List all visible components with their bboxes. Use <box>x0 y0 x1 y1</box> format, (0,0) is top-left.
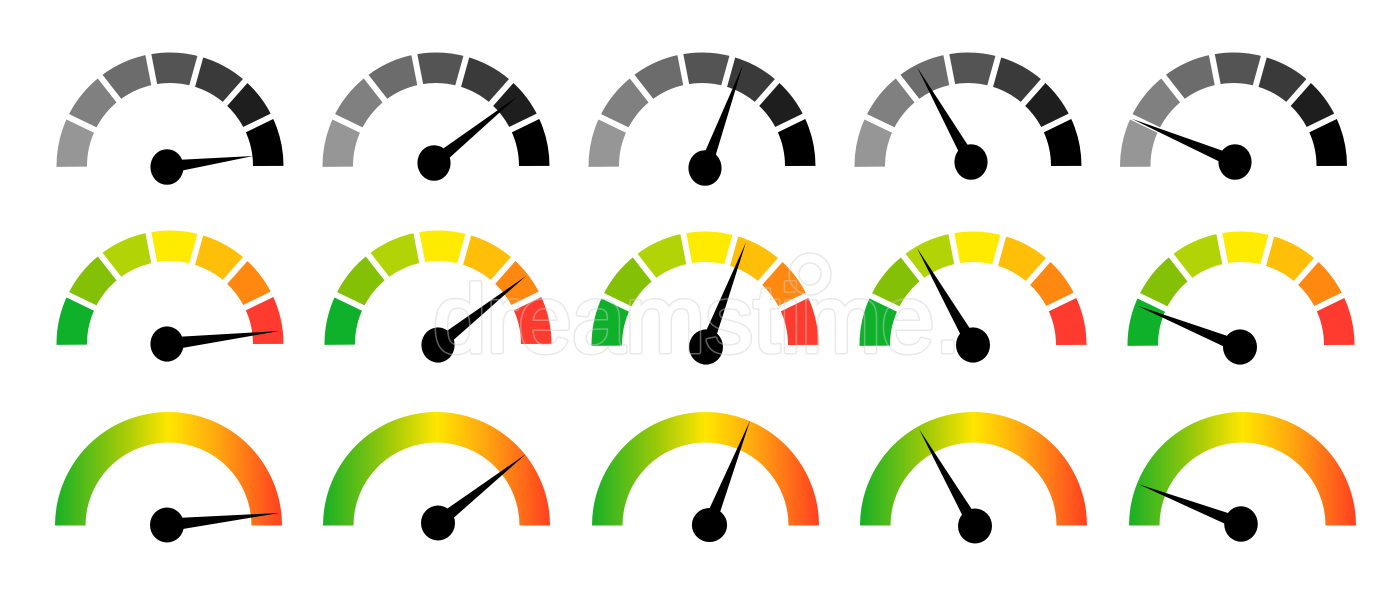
gauge: colour needle far right <box>31 205 309 483</box>
hub <box>956 327 990 363</box>
gauge: gradient needle near top right <box>592 412 819 542</box>
dial <box>1129 412 1356 526</box>
hub <box>954 144 988 180</box>
hub <box>417 145 451 181</box>
hub <box>150 326 184 362</box>
row: grey segmented gauges <box>31 27 1372 305</box>
hub <box>150 149 184 185</box>
hub <box>958 508 992 544</box>
gauge: gradient needle far right <box>55 412 282 542</box>
needle <box>912 64 977 165</box>
dial <box>563 27 841 305</box>
hub <box>421 327 455 363</box>
dial <box>323 412 550 526</box>
hub <box>1223 329 1257 365</box>
needle <box>430 91 522 168</box>
gauge: colour needle upper right <box>299 205 577 483</box>
needle <box>434 449 530 528</box>
hub <box>1218 144 1252 180</box>
watermark <box>434 252 955 356</box>
hub <box>1224 506 1258 542</box>
gauge: grey needle upper left <box>829 27 1107 305</box>
dial <box>1095 27 1372 305</box>
needle <box>1136 478 1243 530</box>
dial <box>860 412 1087 526</box>
needle <box>700 240 752 349</box>
gauge: gradient needle far left <box>1129 412 1356 542</box>
dial <box>55 412 282 526</box>
hub <box>692 508 727 542</box>
hub <box>688 150 722 186</box>
gauge: grey needle far right <box>31 27 309 305</box>
needle <box>166 325 280 350</box>
dial <box>31 205 309 483</box>
gauge: colour needle far left <box>1102 206 1380 484</box>
row: coloured segmented gauges <box>31 205 1380 484</box>
dial <box>299 205 577 483</box>
row: gradient gauges <box>55 412 1356 544</box>
dial <box>31 27 309 305</box>
hub <box>150 508 184 542</box>
needle <box>1129 113 1238 168</box>
dial <box>592 412 819 526</box>
gauge: gradient needle upper left <box>860 412 1087 544</box>
gauge: grey needle near top right <box>563 27 841 305</box>
dial <box>566 206 844 484</box>
dial <box>297 27 575 305</box>
dial <box>829 27 1107 305</box>
gauge: gradient needle upper right <box>323 412 550 540</box>
gauge: grey needle far left <box>1095 27 1372 305</box>
needle <box>703 418 756 527</box>
hub <box>689 329 723 365</box>
gauge: colour needle near top right <box>566 206 844 484</box>
hub <box>421 506 455 540</box>
needle <box>699 63 749 170</box>
needle <box>166 149 254 173</box>
needle <box>166 507 280 531</box>
gauge: grey needle upper right <box>297 27 575 305</box>
needle <box>434 271 530 350</box>
gauge: colour needle upper left <box>834 206 1112 484</box>
needle <box>911 245 979 348</box>
dial <box>834 206 1112 484</box>
needle <box>1136 300 1242 353</box>
needle <box>913 426 981 529</box>
dial <box>1102 206 1380 484</box>
